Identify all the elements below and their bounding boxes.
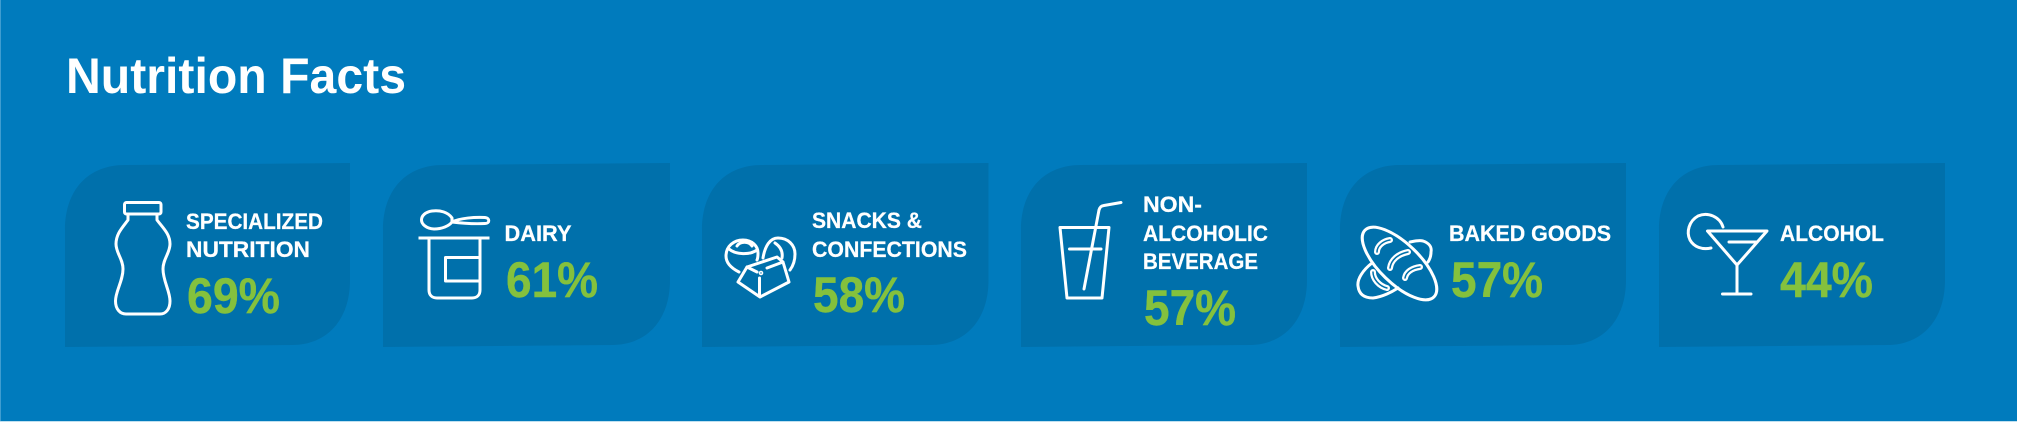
label: SPECIALIZED	[186, 209, 323, 234]
icon: cocktail glass	[1688, 214, 1767, 294]
label: NON-	[1143, 192, 1202, 217]
panel background	[1340, 163, 1626, 347]
value: 44%	[1780, 252, 1873, 308]
title: Nutrition Facts	[66, 48, 406, 104]
label: ALCOHOLIC	[1143, 221, 1268, 246]
icon: bottle	[116, 202, 170, 314]
label	[812, 208, 967, 262]
label: BEVERAGE	[1143, 249, 1258, 274]
value: 57%	[1144, 280, 1236, 336]
label	[186, 209, 323, 262]
value: 57%	[1451, 252, 1543, 308]
label: NUTRITION	[186, 237, 310, 262]
label	[1143, 192, 1268, 274]
panel background	[1021, 163, 1307, 347]
label: DAIRY	[504, 221, 572, 246]
value: 61%	[506, 252, 598, 308]
label: ALCOHOL	[1780, 221, 1884, 246]
value: 69%	[187, 268, 280, 324]
label: CONFECTIONS	[812, 237, 967, 262]
panel background	[702, 163, 988, 347]
panel: specialized nutrition	[65, 163, 350, 347]
panel: dairy	[383, 163, 670, 347]
icon: yogurt cup and spoon	[418, 211, 490, 298]
icon: bread loaves	[1351, 216, 1448, 311]
panel: baked goods	[1340, 163, 1626, 347]
panel: non-alcoholic beverage	[1021, 163, 1307, 347]
icon: glass with straw	[1060, 202, 1121, 298]
label: SNACKS &	[812, 208, 922, 233]
panel background	[383, 163, 670, 347]
icon: confections	[726, 238, 795, 297]
panel: alcohol	[1659, 163, 1945, 347]
panel background	[1659, 163, 1945, 347]
panel: snacks and confections	[702, 163, 988, 347]
label: BAKED GOODS	[1449, 221, 1611, 246]
panel background	[65, 163, 350, 347]
value: 58%	[813, 267, 905, 323]
